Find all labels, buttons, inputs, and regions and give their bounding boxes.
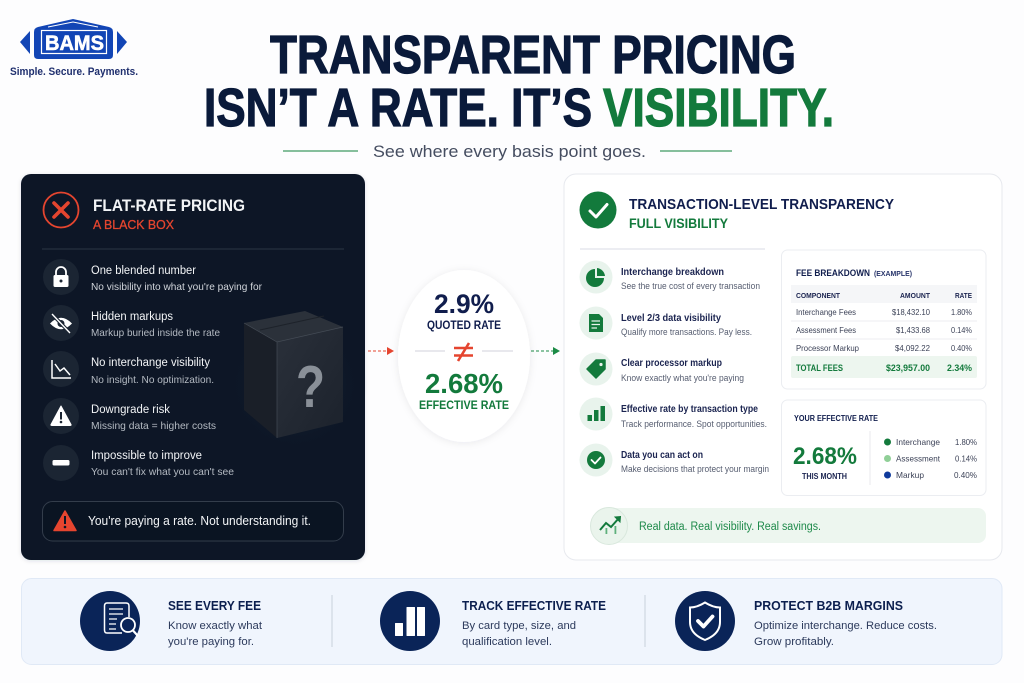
- title: ISN’T A RATE. IT’S: [204, 78, 592, 138]
- card: your effective rate: 2.68%: [793, 443, 857, 470]
- row: impossible to improve: [43, 445, 234, 481]
- row: clear processor markup: [580, 352, 744, 386]
- row: data you can act on: Make decisions that protect your margin: [621, 464, 769, 474]
- card: fee breakdown table: [782, 250, 986, 389]
- row: effective rate by transaction type: Track performance. Spot opportunities.: [621, 419, 767, 429]
- card: your effective rate: Markup: [896, 470, 924, 480]
- card: your effective rate: [782, 400, 986, 496]
- row: effective rate by transaction type: [580, 398, 767, 430]
- effective rate: EFFECTIVE RATE: [419, 400, 509, 412]
- benefit: see every fee: SEE EVERY FEE: [168, 599, 261, 613]
- panel: flat-rate pricing: [21, 174, 367, 560]
- effective rate: 2.68%: [425, 368, 503, 399]
- row: hidden markups: Hidden markups: [91, 311, 173, 323]
- row: effective rate by transaction type: Effective rate by transaction type: [621, 404, 758, 415]
- effective rate: [419, 368, 509, 412]
- card: your effective rate: 1.80%: [955, 437, 977, 447]
- icon: red x: [44, 192, 78, 228]
- benefit: see every fee: Know exactly what: [168, 620, 262, 632]
- card: fee breakdown table: $4,092.22: [895, 343, 930, 353]
- heading: transaction-level transparency: TRANSACTION-LEVEL TRANSPARENCY: [629, 196, 894, 213]
- row: no interchange visibility: No interchange visibility: [91, 357, 210, 369]
- card: fee breakdown table: AMOUNT: [900, 291, 930, 300]
- card: fee breakdown table: 0.14%: [951, 325, 972, 335]
- card: fee breakdown table: $1,433.68: [896, 325, 930, 335]
- card: your effective rate: 0.40%: [954, 470, 977, 480]
- benefit: protect b2b margins: Optimize interchange. Reduce costs.: [754, 620, 937, 632]
- row: hidden markups: Markup buried inside the rate: [91, 327, 220, 339]
- card: fee breakdown table: $18,432.10: [892, 307, 930, 317]
- benefit: track effective rate: [380, 591, 606, 651]
- card: your effective rate: THIS MONTH: [802, 472, 847, 481]
- card: fee breakdown table: 2.34%: [947, 363, 973, 374]
- card: fee breakdown table: 0.40%: [951, 343, 972, 353]
- subheading: a black box: A BLACK BOX: [93, 217, 174, 232]
- panel: bottom benefits: [22, 578, 1002, 664]
- card: fee breakdown table: 1.80%: [951, 307, 972, 317]
- title: VISIBILITY.: [603, 78, 834, 138]
- benefit: protect b2b margins: [675, 591, 937, 651]
- row: level 2/3 data: [580, 306, 752, 340]
- card: fee breakdown table: RATE: [955, 291, 972, 300]
- logo: BAMS: BAMS: [45, 32, 104, 55]
- row: hidden markups: [43, 305, 220, 341]
- card: fee breakdown table: COMPONENT: [796, 291, 840, 300]
- benefit: see every fee: you're paying for.: [168, 636, 254, 648]
- icon: green check: [580, 192, 616, 228]
- card: fee breakdown table: Interchange Fees: [796, 307, 856, 317]
- subtitle: See where every basis point goes.: [373, 142, 646, 161]
- row: interchange breakdown: Interchange breakdown: [621, 267, 724, 278]
- banner: real data: Real data. Real visibility. Real savings.: [639, 521, 821, 533]
- row: downgrade risk: Missing data = higher costs: [91, 420, 216, 432]
- card: your effective rate: YOUR EFFECTIVE RATE: [794, 414, 879, 423]
- card: your effective rate: 0.14%: [955, 454, 977, 464]
- card: fee breakdown table: Assessment Fees: [796, 325, 856, 335]
- benefit: see every fee: [80, 591, 262, 651]
- benefit: track effective rate: qualification level.: [462, 636, 552, 648]
- card: your effective rate: Assessment: [896, 454, 941, 464]
- row: one blended number: No visibility into what you're paying for: [91, 281, 262, 293]
- logo: BAMS: Simple. Secure. Payments.: [10, 66, 138, 78]
- row: interchange breakdown: [580, 260, 760, 294]
- row: no interchange visibility: No insight. No optimization.: [91, 374, 214, 386]
- heading: flat-rate pricing: FLAT-RATE PRICING: [93, 197, 245, 215]
- row: downgrade risk: [43, 398, 216, 434]
- row: level 2/3 data: Level 2/3 data visibility: [621, 313, 721, 324]
- panel: rate comparison oval: [398, 270, 530, 442]
- quoted rate: [427, 289, 501, 332]
- benefit: protect b2b margins: Grow profitably.: [754, 636, 834, 648]
- card: your effective rate: Interchange: [896, 437, 940, 447]
- row: data you can act on: [580, 444, 769, 476]
- row: impossible to improve: You can't fix what you can't see: [91, 466, 234, 478]
- card: fee breakdown table: Processor Markup: [796, 343, 859, 353]
- quoted rate: 2.9%: [434, 289, 494, 319]
- row: one blended number: One blended number: [91, 265, 196, 277]
- benefit: track effective rate: TRACK EFFECTIVE RATE: [462, 599, 606, 613]
- row: clear processor markup: Know exactly what you're paying: [621, 373, 744, 383]
- panel: transaction-level transparency: [564, 174, 1002, 560]
- card: fee breakdown table: FEE BREAKDOWN: [796, 268, 870, 279]
- row: one blended number: [43, 259, 262, 295]
- logo: BAMS: [10, 19, 138, 78]
- benefit: protect b2b margins: PROTECT B2B MARGINS: [754, 599, 903, 613]
- row: level 2/3 data: Qualify more transactions. Pay less.: [621, 327, 752, 337]
- title: [204, 25, 834, 138]
- row: clear processor markup: Clear processor markup: [621, 358, 722, 369]
- card: fee breakdown table: $23,957.00: [886, 363, 930, 374]
- illustration: black box with question mark: [223, 311, 367, 457]
- callout: paying a rate: [42, 502, 344, 541]
- row: data you can act on: Data you can act on: [621, 450, 703, 461]
- illustration: black box with question mark: ?: [296, 354, 325, 420]
- quoted rate: QUOTED RATE: [427, 320, 501, 332]
- subheading: full visibility: FULL VISIBILITY: [629, 215, 729, 231]
- title: TRANSPARENT PRICING: [270, 25, 796, 85]
- card: fee breakdown table: TOTAL FEES: [796, 363, 843, 373]
- banner: real data: [590, 508, 986, 544]
- row: interchange breakdown: See the true cost of every transaction: [621, 281, 760, 291]
- callout: paying a rate: You're paying a rate. Not understanding it.: [88, 513, 311, 528]
- benefit: track effective rate: By card type, size, and: [462, 620, 576, 632]
- row: downgrade risk: Downgrade risk: [91, 404, 170, 416]
- row: impossible to improve: Impossible to improve: [91, 450, 202, 462]
- arrow: green dashed: [531, 347, 560, 355]
- row: no interchange visibility: [43, 351, 214, 387]
- not equal sign: [415, 343, 513, 361]
- arrow: red dashed: [368, 347, 394, 355]
- card: fee breakdown table: (EXAMPLE): [874, 269, 912, 278]
